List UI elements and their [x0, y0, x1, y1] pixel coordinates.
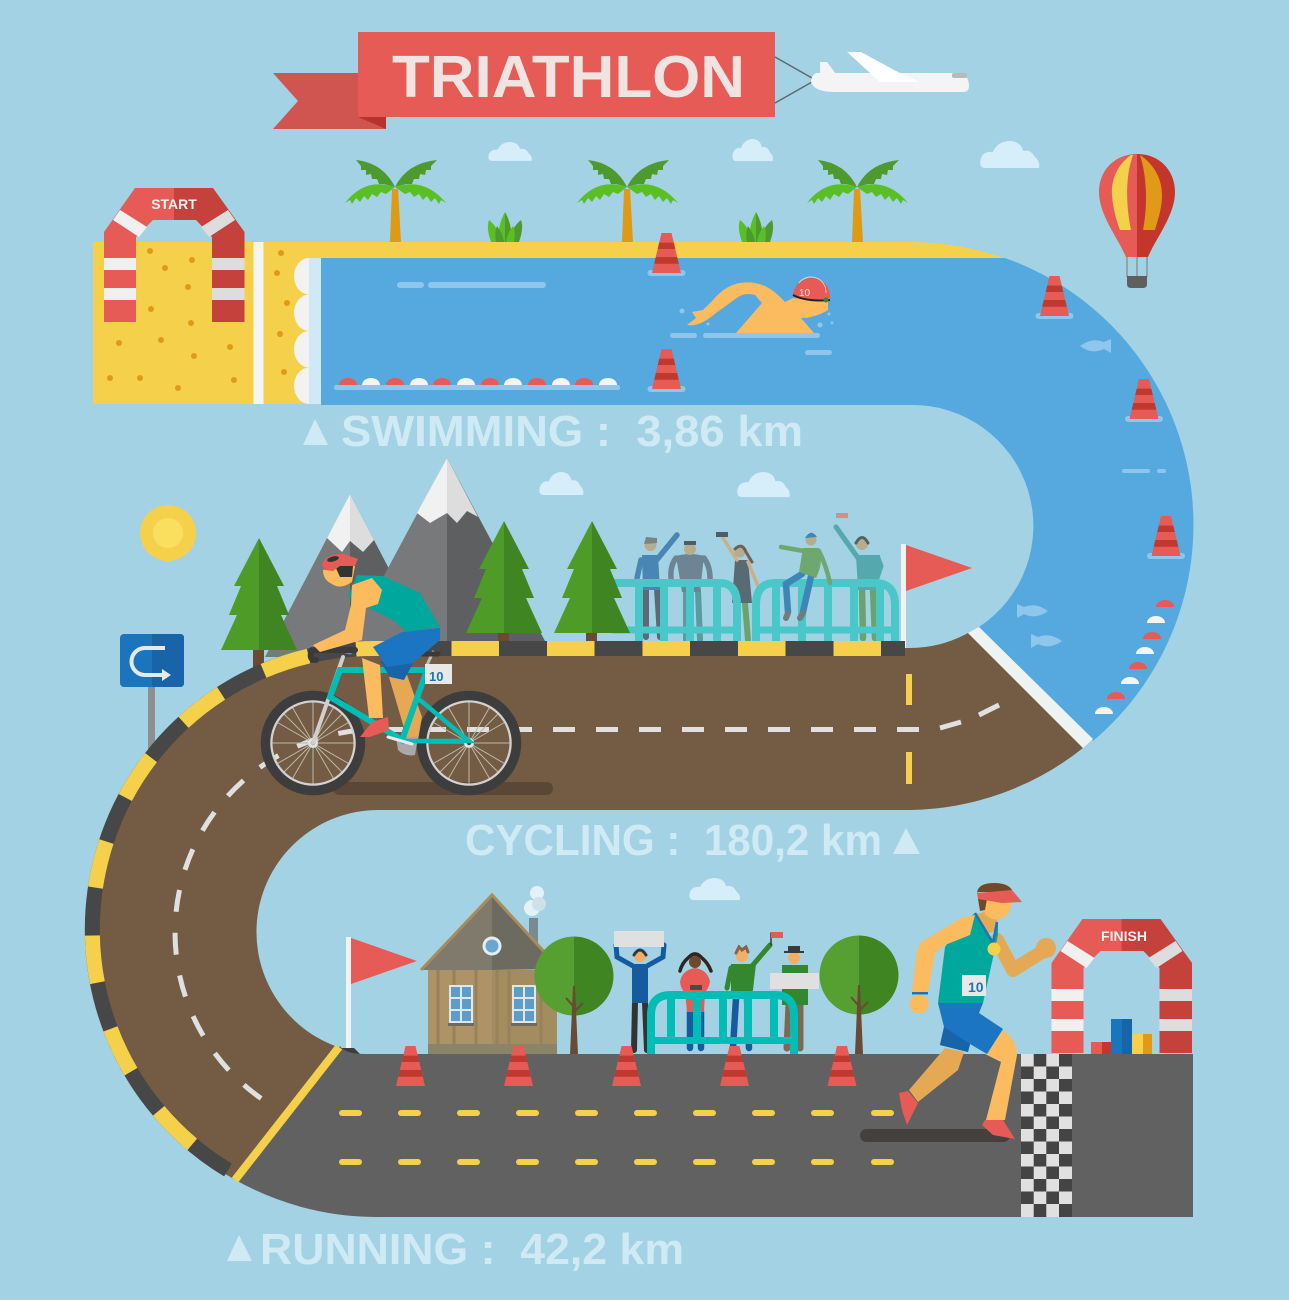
rider shorts — [373, 628, 440, 680]
icon: red flag on running road — [336, 937, 417, 1054]
race bib: 10 — [968, 979, 984, 995]
bicycle frame — [311, 647, 469, 744]
near leg — [985, 1030, 1017, 1120]
road cones — [396, 1046, 856, 1086]
head and visor — [977, 883, 1022, 919]
label: swimming distance: SWIMMING : 3,86 km — [341, 407, 803, 456]
shoreline foam — [294, 258, 321, 404]
seated spectator 4 — [781, 533, 830, 618]
rider leg and shoe — [360, 658, 389, 737]
clouds above mountains — [539, 472, 790, 497]
water ripples — [397, 282, 1166, 473]
runner — [899, 883, 1056, 1139]
house — [421, 886, 560, 1055]
man with hat and sign — [770, 946, 819, 1048]
icon: start arch — [104, 188, 244, 322]
mountains — [265, 458, 545, 657]
rider torso — [348, 575, 440, 632]
fences — [613, 583, 895, 641]
near shoe — [982, 1120, 1015, 1139]
icon: hot air balloon — [1099, 154, 1175, 288]
race number plate — [425, 664, 452, 684]
swimmer: 10 — [799, 288, 811, 299]
cyclist on bike — [266, 554, 516, 790]
swimmer — [687, 277, 830, 333]
lane markings — [339, 1110, 894, 1165]
yellow divider — [235, 1047, 339, 1180]
medal — [975, 913, 1000, 956]
far leg — [909, 1048, 964, 1102]
clouds above beach — [488, 139, 1039, 168]
icon: sun — [140, 505, 196, 561]
far leg — [389, 672, 422, 755]
cloud above house — [689, 878, 740, 900]
spectators behind cycling fence — [613, 513, 895, 641]
buoy line — [334, 378, 620, 390]
icon: red flag on cycling road — [896, 544, 972, 663]
shorts — [938, 1003, 1003, 1054]
pine trees — [221, 521, 630, 668]
bike shadow — [333, 782, 553, 795]
centre line — [175, 705, 999, 1108]
tank top — [938, 913, 998, 1003]
icon: finish arch: FINISH — [1101, 928, 1147, 944]
yellow transition markings — [906, 674, 912, 784]
water divider — [968, 627, 1093, 748]
title banner — [273, 32, 775, 129]
runner shadow — [860, 1129, 1010, 1142]
spectator with sign — [614, 931, 664, 1050]
spectators behind running fence — [614, 931, 819, 1054]
label: running distance: RUNNING : 42,2 km — [260, 1225, 684, 1274]
near arm — [912, 915, 975, 992]
spectator 2 — [671, 541, 710, 640]
man with flag — [727, 932, 783, 1048]
icon: airplane towing banner — [775, 52, 969, 103]
far shoe — [899, 1091, 918, 1125]
fence — [651, 995, 794, 1054]
buoys along curve — [1095, 600, 1174, 714]
rider head and helmet — [322, 554, 358, 587]
panel: running road — [232, 1046, 1193, 1217]
race bib — [962, 975, 986, 996]
icon: finish arch — [1052, 919, 1192, 1053]
panel: cycling road — [89, 627, 1093, 1178]
panel: swimming course — [93, 233, 1193, 741]
neck — [974, 912, 998, 934]
icon: podium — [1091, 1019, 1152, 1054]
spectator 1 — [637, 535, 677, 637]
icon: start arch: START — [151, 196, 197, 212]
water — [321, 258, 1193, 741]
kerb — [92, 648, 905, 1170]
label: cycling distance: CYCLING : 180,2 km — [465, 816, 882, 865]
title banner: TRIATHLON — [392, 44, 745, 110]
far arm — [997, 938, 1056, 970]
fist and wristband — [910, 992, 928, 1014]
wheels — [266, 696, 516, 790]
beach sand — [93, 242, 1006, 404]
checkered finish line — [1021, 1054, 1072, 1217]
spectator 5 — [836, 513, 881, 638]
road surface — [89, 633, 1083, 1178]
round trees — [534, 936, 898, 1055]
marker cones — [648, 233, 1185, 559]
girl with camera — [680, 954, 711, 1048]
spectator 3 — [716, 532, 758, 640]
race number plate: 10 — [429, 669, 443, 684]
fish — [1017, 339, 1111, 648]
rider arm — [313, 578, 382, 652]
palm trees and plants — [345, 160, 908, 242]
icon: u-turn road sign — [120, 634, 184, 757]
road surface — [232, 1046, 1193, 1217]
